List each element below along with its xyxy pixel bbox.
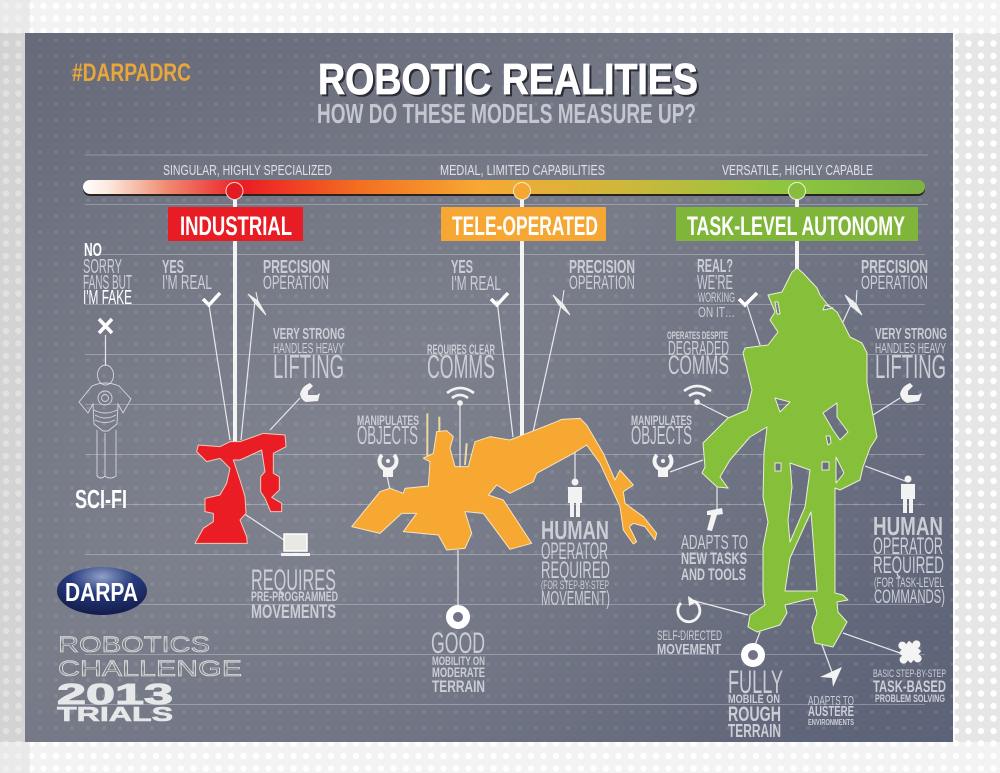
- icon: x mark: [99, 319, 112, 333]
- comms text: COMMS: [668, 350, 729, 380]
- capability scale labels: [163, 162, 873, 179]
- strength text: VERY STRONG: [875, 326, 947, 343]
- robot: tele-operated vehicle: [352, 413, 657, 550]
- problem solving text: BASIC STEP-BY-STEP: [873, 668, 946, 680]
- yes text: [451, 257, 501, 295]
- mobility text: FULLY: [728, 664, 783, 700]
- comms text: REQUIRES CLEAR: [427, 341, 495, 357]
- precision text: [861, 257, 928, 294]
- mobility text: MOBILITY ON: [432, 654, 485, 668]
- human operator text: REQUIRED: [873, 552, 944, 579]
- precision text: OPERATION: [861, 273, 928, 294]
- capability scale labels: VERSATILE, HIGHLY CAPABLE: [722, 162, 873, 179]
- adapts text: NEW TASKS: [681, 549, 747, 568]
- human operator text: OPERATOR: [541, 538, 608, 565]
- label: task-level autonomy: [676, 207, 918, 241]
- self-directed text: SELF-DIRECTED: [657, 627, 722, 643]
- manipulates text: [631, 412, 692, 450]
- icon: flexing arm: [900, 383, 922, 403]
- icon: hammer: [707, 508, 723, 531]
- human operator text: HUMAN: [541, 515, 609, 545]
- label: tele-operated: [441, 207, 606, 241]
- icon: circular arrow: [678, 596, 700, 622]
- comms text: COMMS: [427, 348, 495, 385]
- manipulates text: MANIPULATES: [357, 412, 419, 428]
- icon: flexing arm: [300, 383, 320, 402]
- problem solving text: TASK-BASED: [873, 677, 946, 696]
- problem solving text: PROBLEM SOLVING: [875, 693, 945, 705]
- austere text: ADAPTS TO: [808, 693, 854, 708]
- column: sci-fi: [75, 240, 132, 514]
- manipulates text: OBJECTS: [357, 420, 418, 450]
- strength text: HANDLES HEAVY: [273, 340, 344, 357]
- sci-fi text: I'M FAKE: [83, 287, 132, 309]
- precision text: [569, 257, 635, 294]
- logo: darpa: [57, 567, 147, 615]
- icon: pincer: [845, 290, 862, 315]
- comms text: OPERATES DESPITE: [667, 330, 728, 342]
- connector stems: [233, 198, 799, 443]
- sci-fi text: SORRY: [83, 256, 122, 278]
- logo: robotics challenge 2013 trials: 2013: [57, 679, 173, 711]
- precision text: OPERATION: [569, 273, 635, 294]
- precision text: PRECISION: [263, 257, 330, 277]
- icon: wheel: [450, 608, 466, 626]
- precision text: PRECISION: [861, 257, 928, 277]
- adapts text: AND TOOLS: [681, 565, 746, 584]
- strength text: HANDLES HEAVY: [875, 340, 946, 357]
- icon: wifi: [684, 386, 711, 404]
- sci-fi text: NO: [84, 240, 102, 260]
- capability gradient bar: [83, 180, 925, 200]
- movements text: REQUIRES: [251, 564, 336, 597]
- mobility text: MODERATE: [432, 664, 485, 680]
- austere text: ENVIRONMENTS: [808, 718, 854, 727]
- column: industrial: [162, 257, 345, 623]
- icon: pincer: [553, 290, 570, 315]
- title: ROBOTIC REALITIES: [318, 55, 698, 104]
- mobility text: GOOD: [431, 627, 485, 660]
- capability scale labels: MEDIAL, LIMITED CAPABILITIES: [440, 162, 605, 179]
- column: tele-operated: [352, 257, 657, 696]
- self-directed text: MOVEMENT: [657, 641, 721, 658]
- subtitle: HOW DO THESE MODELS MEASURE UP?: [317, 98, 696, 129]
- comms text: [667, 330, 729, 380]
- human operator text: MOVEMENT): [541, 588, 610, 610]
- mobility text: [728, 664, 783, 741]
- human operator text: (FOR TASK-LEVEL: [874, 574, 944, 590]
- sci-fi text: [83, 240, 132, 309]
- adapts text: [681, 532, 748, 584]
- icon: pincer: [248, 292, 266, 315]
- yes text: YES: [451, 257, 473, 277]
- human operator text: COMMANDS): [874, 587, 945, 608]
- robot: humanoid outline: [79, 365, 131, 478]
- movements text: PRE-PROGRAMMED: [251, 588, 338, 604]
- icon: human: [901, 476, 915, 513]
- austere text: [808, 693, 854, 727]
- real text: REAL?: [697, 256, 733, 276]
- manipulates text: MANIPULATES: [631, 412, 692, 428]
- icon: gripper: [655, 455, 672, 477]
- label: tele-operated: TELE-OPERATED: [452, 211, 598, 241]
- strength text: LIFTING: [875, 348, 946, 385]
- comms text: DEGRADED: [668, 338, 729, 360]
- logo: darpa: DARPA: [65, 577, 138, 607]
- precision text: [263, 257, 330, 294]
- sci-fi label: SCI-FI: [75, 484, 127, 514]
- icon: navigation arrow: [820, 667, 842, 687]
- yes text: YES: [162, 257, 184, 277]
- strength text: LIFTING: [273, 348, 344, 385]
- manipulates text: OBJECTS: [631, 420, 692, 450]
- mobility text: TERRAIN: [728, 721, 781, 741]
- logo: robotics challenge 2013 trials: CHALLENGE: [58, 656, 242, 681]
- label: industrial: INDUSTRIAL: [180, 211, 292, 241]
- title: ROBOTIC REALITIES: [320, 57, 700, 106]
- logo: robotics challenge 2013 trials: [57, 632, 242, 726]
- mobility text: ROUGH: [728, 703, 781, 726]
- real text: [697, 256, 735, 321]
- sci-fi text: FANS BUT: [83, 272, 132, 294]
- real text: ON IT…: [698, 304, 735, 321]
- mobility text: MOBILE ON: [728, 692, 780, 706]
- yes text: I'M REAL: [451, 273, 501, 295]
- strength text: [273, 326, 345, 385]
- logo: robotics challenge 2013 trials: ROBOTICS: [58, 632, 210, 657]
- precision text: OPERATION: [263, 273, 329, 294]
- self-directed text: [657, 627, 722, 658]
- icon: wheel: [744, 646, 762, 664]
- label: industrial: [168, 207, 303, 241]
- human operator text: REQUIRED: [541, 557, 610, 584]
- movements text: MOVEMENTS: [251, 602, 336, 623]
- movements text: [251, 564, 338, 623]
- manipulates text: [357, 412, 419, 450]
- real text: WORKING: [698, 289, 735, 305]
- column: task-level autonomy: [631, 256, 947, 741]
- hashtag: #DARPADRC: [72, 59, 191, 87]
- icon: human: [568, 478, 582, 517]
- icon: wifi: [447, 388, 474, 404]
- real text: WE'RE: [697, 272, 733, 294]
- mobility text: TERRAIN: [432, 677, 485, 696]
- comms text: [427, 341, 495, 385]
- icon: check: [739, 293, 757, 305]
- strength text: [875, 326, 947, 385]
- yes text: I'M REAL: [162, 272, 212, 294]
- icon: gripper: [379, 455, 396, 477]
- precision text: PRECISION: [569, 257, 635, 277]
- adapts text: ADAPTS TO: [681, 532, 748, 554]
- icon: check: [491, 293, 508, 305]
- robot: industrial arm: [195, 433, 286, 543]
- human operator text: [873, 511, 945, 608]
- human operator text: (FOR STEP-BY-STEP: [541, 578, 609, 592]
- logo: robotics challenge 2013 trials: TRIALS: [57, 704, 173, 726]
- problem solving text: [873, 668, 946, 705]
- capability scale labels: SINGULAR, HIGHLY SPECIALIZED: [163, 162, 332, 179]
- human operator text: [541, 515, 610, 610]
- yes text: [162, 257, 212, 294]
- austere text: AUSTERE: [808, 703, 854, 720]
- icon: check: [203, 293, 220, 305]
- icon: laptop: [281, 534, 310, 556]
- human operator text: HUMAN: [873, 511, 943, 541]
- icon: puzzle piece: [890, 632, 930, 672]
- mobility text: [431, 627, 485, 696]
- strength text: VERY STRONG: [273, 326, 345, 343]
- robot: green humanoid: [702, 268, 877, 647]
